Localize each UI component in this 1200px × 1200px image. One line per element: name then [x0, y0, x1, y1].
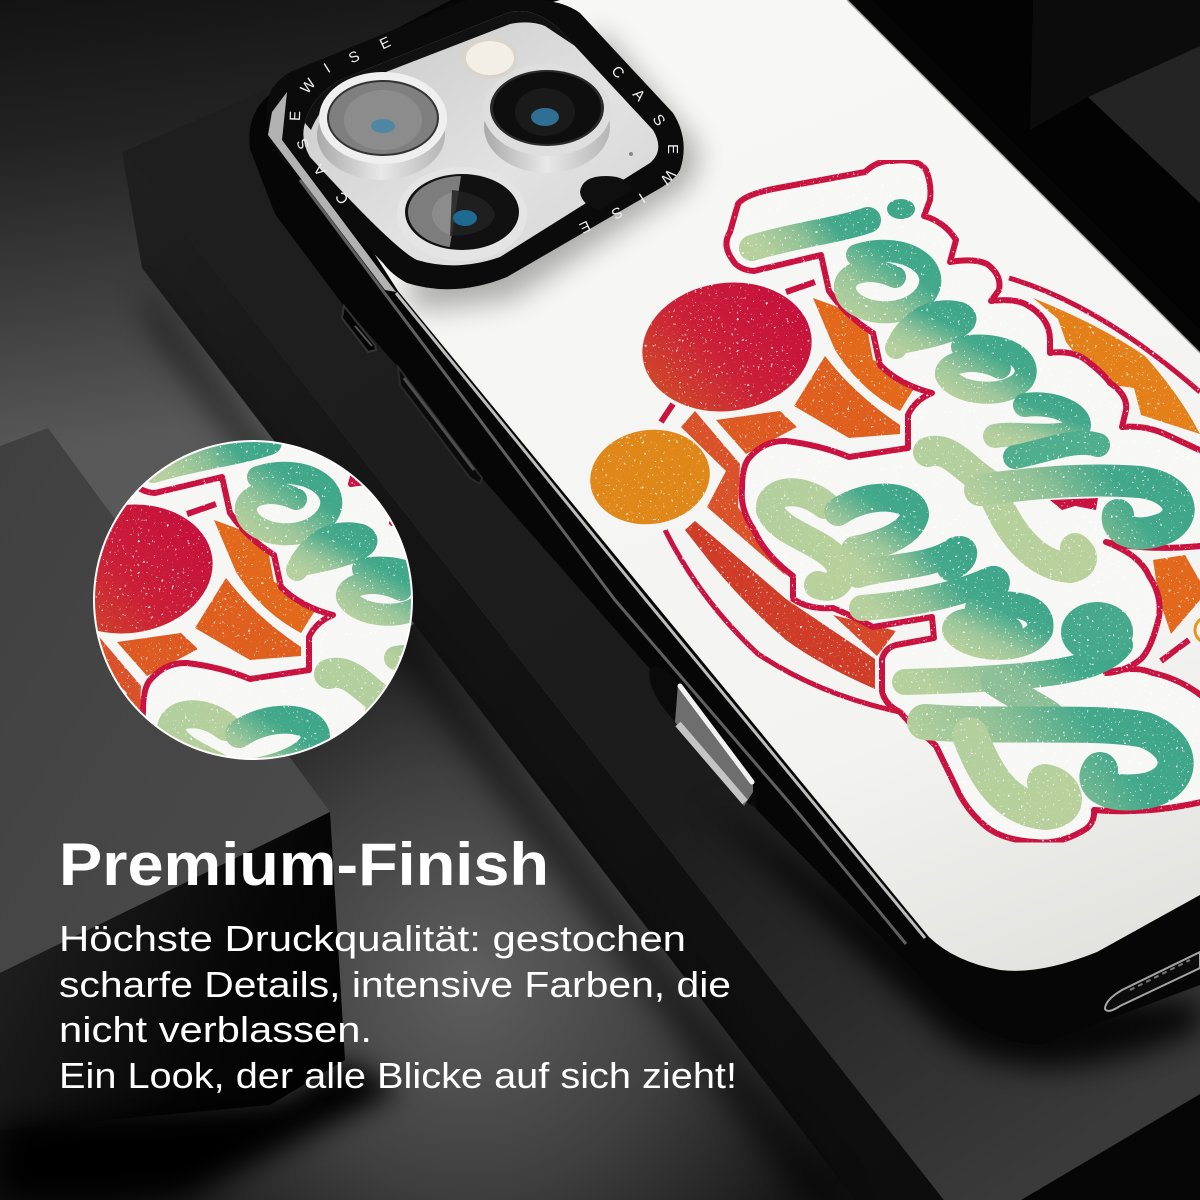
block: main block side face	[122, 152, 944, 1200]
camera island: grey wedge	[268, 92, 396, 292]
body text: scharfe Details, intensive Farben, die	[59, 964, 731, 1005]
camera ring lettering: left	[287, 34, 393, 207]
block: lower floor	[0, 600, 860, 1200]
artwork: orange segment left	[681, 411, 786, 576]
background: upper right black recess	[800, 0, 1200, 400]
phone: white printed back	[340, 0, 1200, 971]
heading: Premium-Finish	[59, 831, 549, 898]
block: lower left cube top	[0, 428, 330, 973]
artwork on phone back	[584, 160, 1200, 842]
camera ring lettering: left: I	[321, 60, 334, 77]
camera ring lettering: left: E	[287, 111, 304, 121]
camera ring lettering: left: A	[311, 161, 330, 179]
camera ring lettering: right: W	[656, 166, 679, 188]
artwork: orange circle	[590, 430, 710, 524]
artwork: orange segment lower small	[833, 615, 896, 656]
camera ring lettering: right: S	[649, 111, 668, 129]
block: upper right cube top	[1088, 46, 1200, 203]
phone: mute switch	[342, 306, 376, 352]
block: lower left cube front	[0, 812, 345, 1130]
artwork: red orange segment large	[685, 521, 875, 689]
camera: lens top left	[317, 72, 447, 180]
phone: power button	[649, 667, 757, 808]
artwork: lettering backing outline	[726, 160, 1200, 842]
body text: Ein Look, der alle Blicke auf sich zieht!	[59, 1055, 737, 1096]
artwork: ring arc lower left	[665, 530, 900, 712]
camera: lens top right	[483, 64, 611, 173]
artwork: dash right	[1161, 640, 1189, 661]
camera ring lettering: right: A	[629, 86, 648, 105]
background: upper right faint panel	[1030, 0, 1200, 130]
artwork: orange segment top	[813, 298, 920, 411]
artwork: inner red fleck	[1050, 498, 1098, 510]
phone: volume button	[398, 367, 482, 484]
artwork: lettering swirls (decorative illustration)	[752, 199, 1179, 812]
camera ring lettering: left: E	[377, 34, 393, 53]
phone: right edge hairline	[847, 0, 1200, 353]
camera: flash	[462, 37, 518, 79]
camera island: black rim	[266, 0, 684, 289]
camera ring lettering: left: S	[294, 136, 313, 152]
block: bottom right black corner	[1021, 1094, 1200, 1200]
camera island: dark inner top lip	[305, 11, 575, 130]
camera ring lettering: left: S	[346, 48, 362, 67]
camera ring lettering: left: W	[297, 75, 320, 97]
artwork: orange segment right	[1153, 555, 1200, 634]
artwork: orange segment middle	[794, 356, 900, 438]
artwork: dash top	[786, 282, 815, 292]
body text: Höchste Druckqualität: gestochen	[59, 918, 686, 959]
camera ring lettering: right: S	[608, 203, 625, 222]
camera ring lettering: left: C	[332, 188, 352, 207]
camera: microphone dot	[629, 152, 633, 156]
phone: bottom speaker slot	[1105, 952, 1200, 1011]
body text: nicht verblassen.	[59, 1009, 372, 1050]
artwork: orange segment top right	[1033, 298, 1200, 434]
body text	[59, 918, 737, 1096]
artwork: ring arc upper right	[1009, 278, 1200, 392]
camera ring lettering: right: E	[577, 217, 593, 236]
camera ring lettering: right: E	[664, 144, 681, 154]
artwork: small yellow circle	[1195, 617, 1200, 643]
block: right of phone black	[860, 0, 1200, 345]
magnified detail circle	[93, 440, 413, 760]
phone: shadow	[700, 800, 1200, 1068]
phone: outer silver reflection line	[300, 180, 906, 944]
phone: case body	[249, 0, 1200, 1045]
artwork: orange segment small	[716, 411, 797, 454]
artwork: red circle	[634, 272, 820, 422]
block: side face shadow on floor	[142, 285, 850, 1200]
camera: lens bottom	[405, 174, 519, 250]
camera ring lettering: right	[577, 63, 681, 236]
camera island: glass plate	[303, 11, 658, 265]
camera ring lettering: right: I	[635, 189, 648, 206]
artwork: dash left	[661, 404, 673, 422]
phone: island shadow on back	[400, 30, 700, 310]
camera ring lettering: right: C	[608, 63, 628, 82]
block: bottom left shadow	[0, 1060, 400, 1200]
camera: lidar sensor	[580, 176, 632, 210]
phone: inner bright screen rim	[396, 293, 925, 938]
